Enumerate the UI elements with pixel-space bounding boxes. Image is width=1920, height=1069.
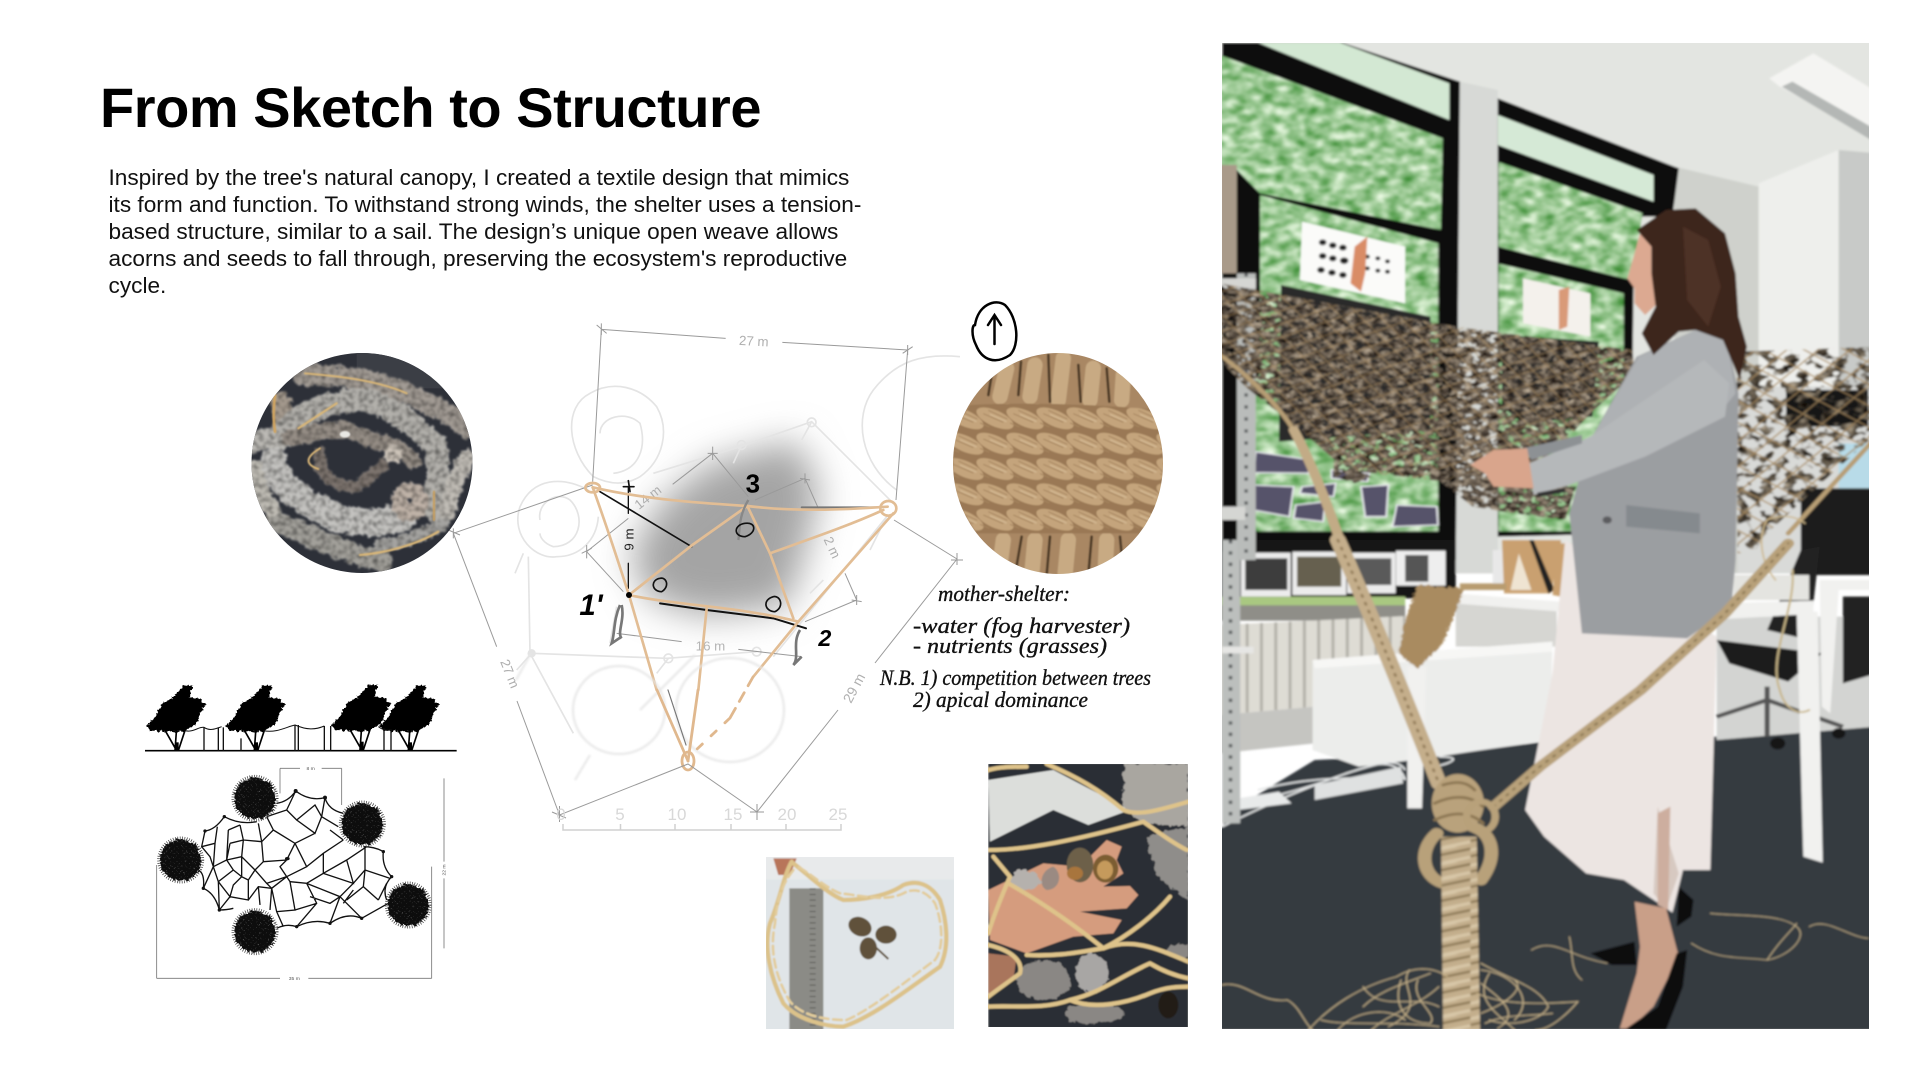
woven straw loop	[767, 862, 946, 1027]
dimension text: 22 m	[442, 864, 448, 876]
dimension text: 8 m	[307, 766, 315, 772]
wall right area	[1717, 617, 1877, 740]
handwritten notes	[879, 581, 1151, 712]
handwritten notes: - nutrients (grasses)	[913, 633, 1107, 658]
rope structure	[585, 483, 896, 690]
framed photos	[1220, 540, 1456, 598]
dimension labels: 2 m	[821, 534, 844, 561]
right-side black furniture	[1843, 597, 1877, 683]
title: From Sketch to Structure	[100, 76, 761, 139]
cables and power strip	[1222, 757, 1453, 827]
vertical rope post	[1441, 837, 1480, 1030]
left window frame	[1222, 43, 1460, 560]
hands	[1470, 448, 1534, 488]
scale bar: 5	[615, 805, 625, 824]
dimension labels: 27 m	[739, 333, 769, 349]
face	[1627, 230, 1658, 315]
lapel and shoulder	[1590, 330, 1736, 440]
loose fibre on table	[1777, 570, 1809, 712]
collage pieces	[1253, 452, 1438, 527]
handwritten notes: -water (fog harvester)	[913, 613, 1130, 638]
net nodes	[202, 789, 393, 928]
frame stands	[1502, 540, 1571, 597]
wool tufts	[1010, 870, 1193, 1023]
intro paragraph: Inspired by the tree's natural canopy, I created a textile design that mimics	[108, 165, 849, 190]
sketch rope to bottom anchor	[657, 677, 753, 770]
right window frame	[1498, 98, 1679, 537]
north arrow	[972, 302, 1016, 360]
intro paragraph: cycle.	[108, 273, 166, 298]
acorns in hand through woven net photo	[988, 763, 1193, 1028]
window posters	[1300, 222, 1405, 303]
table	[1407, 575, 1877, 863]
numbered anchor marks: 2	[817, 625, 831, 651]
numbered anchor marks	[579, 468, 831, 665]
numbered anchor marks: 3	[746, 468, 760, 498]
dimension labels: 14 m	[632, 482, 664, 512]
acorn and ruler photo	[765, 856, 955, 1031]
ghost tree outlines	[515, 356, 960, 733]
shelf post	[1222, 540, 1240, 823]
dimension lines	[448, 323, 913, 657]
acorn caps	[1067, 848, 1118, 883]
legs and shoes	[1620, 902, 1679, 1028]
pocket flap	[1626, 505, 1700, 533]
room background	[1220, 40, 1877, 575]
ruler	[789, 888, 823, 1030]
29 m label: 29 m	[840, 670, 868, 705]
scale bar: 25	[829, 805, 847, 824]
main photo: woman adjusting the net	[1220, 40, 1877, 1030]
room lower part	[1220, 540, 1877, 1030]
white box bench	[1313, 642, 1552, 767]
radiator	[1220, 616, 1405, 715]
dark reinforcement lines	[600, 481, 880, 628]
dimension labels: 9 m	[621, 528, 636, 551]
lower sketch lines, tree circles and scale	[516, 520, 963, 830]
elevation: trees in wind	[145, 684, 457, 751]
hair	[1637, 208, 1747, 380]
dimension text: 35 m	[289, 976, 300, 982]
dimension labels	[497, 333, 844, 690]
dark boards behind net	[1279, 285, 1430, 442]
intro paragraph: based structure, similar to a sail. The design’s unique open weave allows	[108, 219, 838, 244]
ropes and knot	[1220, 355, 1877, 1030]
outer dimension lines	[517, 520, 963, 822]
gray canopy shadow	[630, 440, 820, 617]
woven wool net, left section	[1220, 283, 1635, 487]
woman	[1470, 208, 1747, 1030]
hanging wool tufts	[1334, 460, 1576, 520]
carpet	[1220, 720, 1877, 1030]
tree elevation and shelter plan diagram	[145, 684, 457, 982]
sill and greenery	[1220, 597, 1405, 606]
handwritten notes: N.B. 1) competition between trees	[879, 665, 1151, 690]
acorns	[845, 913, 897, 959]
office chair	[1717, 547, 1845, 749]
vertical rope strands	[988, 355, 1123, 575]
dimension labels: 16 m	[696, 639, 725, 654]
scale bar: 10	[668, 805, 686, 824]
scale bar: 20	[778, 805, 796, 824]
plan: trees	[159, 776, 430, 954]
hanging net sample	[1399, 585, 1464, 668]
circular wool detail photo	[252, 353, 472, 573]
hand	[988, 840, 1138, 997]
dimension labels: 27 m	[497, 657, 522, 690]
jacket body	[1569, 330, 1739, 638]
sketch site plan	[448, 323, 960, 733]
scale bar	[556, 805, 847, 830]
knot	[1425, 827, 1491, 883]
intro paragraph: acorns and seeds to fall through, preserving the ecosystem's reproductive	[108, 246, 847, 271]
scale bar: 0	[556, 805, 566, 824]
handwritten notes: 2) apical dominance	[913, 687, 1088, 712]
intro paragraph	[108, 165, 861, 298]
scale bar: 15	[724, 805, 742, 824]
intro paragraph: its form and function. To withstand strong winds, the shelter uses a tension-	[108, 192, 861, 217]
coiled rope band	[953, 404, 1163, 533]
woven wool net, right section	[1736, 347, 1877, 553]
ceiling lamp	[1770, 54, 1869, 126]
dimension text	[289, 766, 448, 982]
sleeve	[1529, 360, 1729, 495]
woven straw	[988, 764, 1188, 1007]
plan dimensions	[157, 768, 444, 978]
pillar	[1456, 82, 1498, 573]
handwritten notes: mother-shelter:	[938, 581, 1070, 606]
plan: tension net cells	[198, 791, 392, 928]
walls and column	[1675, 167, 1759, 573]
circular jute rope detail photo	[953, 353, 1163, 574]
dress	[1525, 540, 1717, 913]
scattered raffia fibres	[1222, 913, 1868, 1030]
numbered anchor marks: 1'	[579, 589, 604, 622]
shelf upper post and nets	[1220, 273, 1877, 560]
